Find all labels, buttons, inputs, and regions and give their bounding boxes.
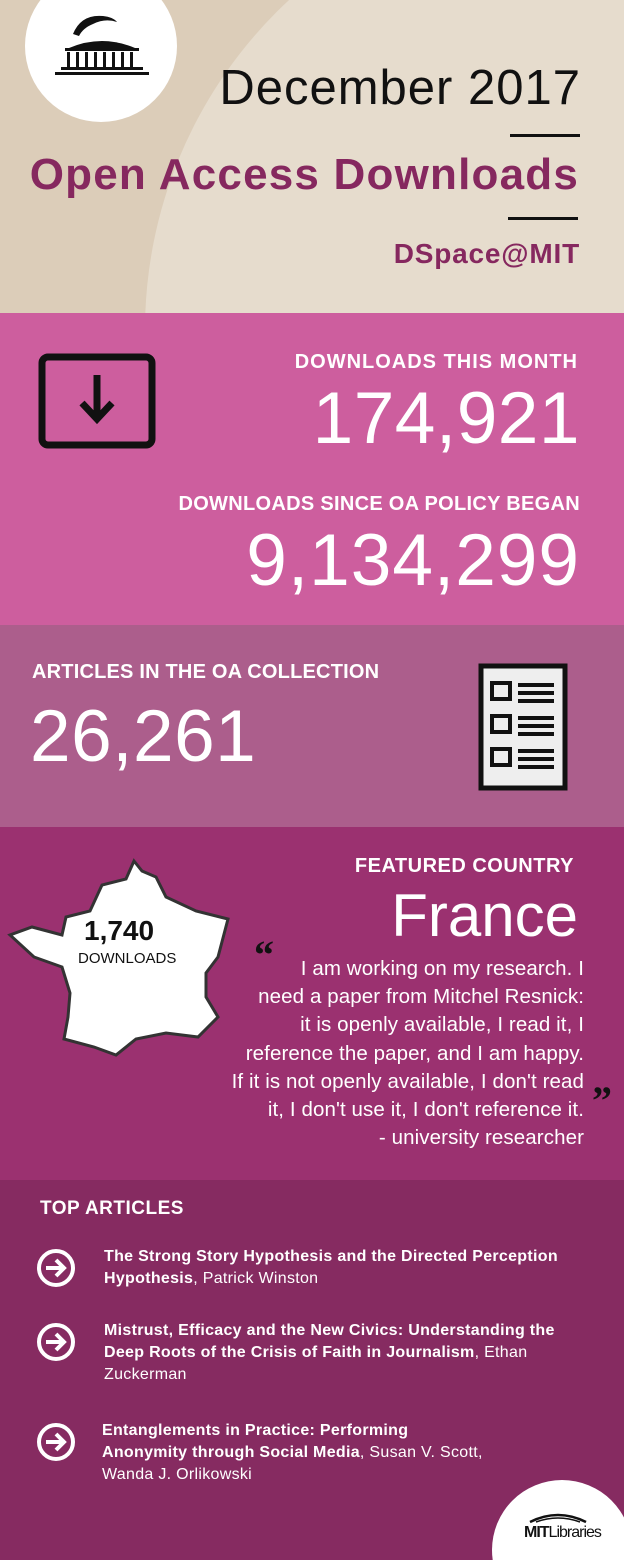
- article 1: Hypothesis, Patrick Winston: [104, 1270, 318, 1287]
- panel: featured country: [0, 827, 624, 1180]
- article 2: Deep Roots of the Crisis of Faith in Journalism, Ethan: [104, 1344, 527, 1361]
- quote: If it is not openly available, I don't read: [232, 1070, 584, 1093]
- quote: need a paper from Mitchel Resnick:: [258, 985, 584, 1008]
- map: France: [7, 858, 230, 1057]
- quote marks: “: [254, 932, 274, 977]
- panel: featured country: ”: [592, 1078, 612, 1123]
- panel: featured country: France: [391, 882, 578, 949]
- panel: featured country: FEATURED COUNTRY: [355, 855, 574, 877]
- icon: document: [478, 664, 568, 790]
- panel: downloads: 9,134,299: [246, 520, 580, 601]
- article 2: Zuckerman: [104, 1366, 187, 1383]
- panel: top articles: TOP ARTICLES: [40, 1198, 184, 1219]
- quote: - university researcher: [379, 1126, 584, 1149]
- panel: downloads: [0, 313, 624, 625]
- panel: articles: ARTICLES IN THE OA COLLECTION: [32, 661, 379, 683]
- article 1: [37, 1248, 558, 1287]
- logo circle: dome: [25, 0, 177, 122]
- article 3: [37, 1422, 483, 1483]
- article 2: Mistrust, Efficacy and the New Civics: Understanding the: [104, 1322, 555, 1339]
- quote: I am working on my research. I: [301, 957, 584, 980]
- icon: download: [38, 354, 156, 448]
- panel: articles: 26,261: [30, 696, 256, 777]
- article 3: Wanda J. Orlikowski: [102, 1466, 252, 1483]
- panel: featured country: 1,740: [84, 915, 154, 946]
- header panel: [0, 0, 624, 313]
- title: Open Access Downloads: [30, 150, 579, 199]
- panel: downloads: DOWNLOADS SINCE OA POLICY BEGAN: [178, 493, 580, 515]
- panel: articles: [0, 625, 624, 827]
- article 1: The Strong Story Hypothesis and the Directed Perception: [104, 1248, 558, 1265]
- quote: it, I don't use it, I don't reference it.: [268, 1098, 584, 1121]
- quote: [232, 957, 584, 1149]
- quote: reference the paper, and I am happy.: [246, 1042, 584, 1065]
- panel: downloads: DOWNLOADS THIS MONTH: [295, 351, 578, 373]
- title date: December 2017: [219, 61, 581, 115]
- panel: top articles: [0, 1180, 624, 1560]
- subtitle: DSpace@MIT: [394, 238, 580, 269]
- panel: featured country: DOWNLOADS: [78, 950, 176, 967]
- panel: downloads: 174,921: [313, 378, 580, 459]
- article 2: [37, 1322, 555, 1383]
- article 3: Anonymity through Social Media, Susan V. Scott,: [102, 1444, 483, 1461]
- logo: MIT Libraries: [492, 1480, 624, 1560]
- article 3: Entanglements in Practice: Performing: [102, 1422, 408, 1439]
- quote: it is openly available, I read it, I: [300, 1013, 584, 1036]
- logo: MIT Libraries: MITLibraries: [524, 1524, 601, 1541]
